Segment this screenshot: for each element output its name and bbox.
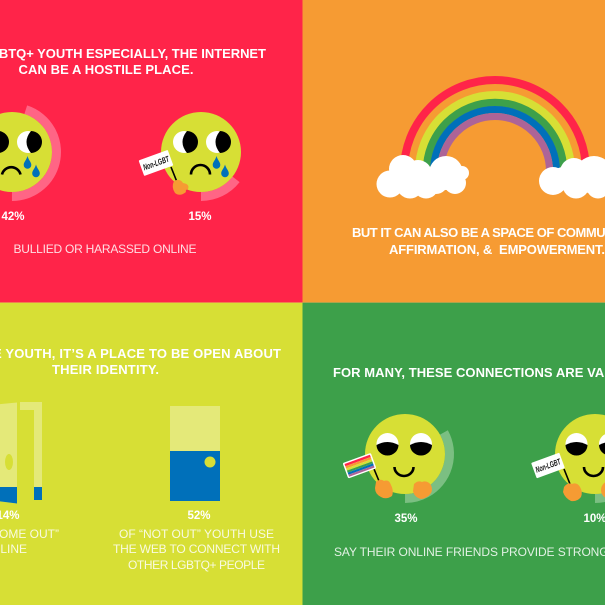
panel: open about identity	[0, 303, 302, 605]
caption: bullied or harassed online: BULLIED OR HARASSED ONLINE	[14, 242, 196, 256]
caption: not out youth: THE WEB TO CONNECT WITH	[113, 542, 280, 556]
chart: LGBTQ online friends 35 percent	[343, 394, 465, 514]
heading: open about identity: THEIR IDENTITY.	[52, 362, 159, 377]
heading: hostile place	[0, 46, 266, 77]
chart: LGBTQ bullied 42 percent	[0, 96, 68, 208]
panel: space of community	[302, 0, 605, 303]
label: 42 percent: 42%	[1, 211, 25, 223]
icon: closed door 52 percent	[170, 406, 220, 501]
caption: come out online	[0, 527, 59, 556]
panel: internet can be hostile	[0, 0, 302, 303]
label: 15 percent: 15%	[188, 211, 212, 223]
caption: not out youth: OTHER LGBTQ+ PEOPLE	[128, 558, 265, 572]
chart: non-LGBT bullied 15 percent	[139, 90, 263, 214]
icon: right cloud	[539, 156, 605, 198]
heading: hostile place: CAN BE A HOSTILE PLACE.	[18, 62, 194, 77]
text: community affirmation: AFFIRMATION, & EMPOWERMENT.	[389, 242, 605, 257]
caption: not out youth	[113, 527, 280, 572]
label: 35 percent: 35%	[394, 513, 418, 525]
icon: rainbow flag	[343, 453, 376, 479]
text: community affirmation	[352, 225, 605, 257]
panel: connections are valuable	[302, 303, 605, 605]
chart: non-LGBT online friends 10 percent	[531, 392, 605, 516]
caption: not out youth: OF “NOT OUT” YOUTH USE	[119, 527, 274, 541]
icon: left cloud	[376, 155, 469, 198]
sign: Non-LGBT: Non-LGBT	[142, 154, 171, 172]
sign: Non-LGBT: Non-LGBT	[534, 456, 562, 475]
icon: rainbow	[385, 80, 605, 275]
label: 52 percent: 52%	[187, 510, 211, 522]
heading: open about identity	[0, 346, 281, 377]
icon: open door 44 percent	[0, 402, 42, 504]
